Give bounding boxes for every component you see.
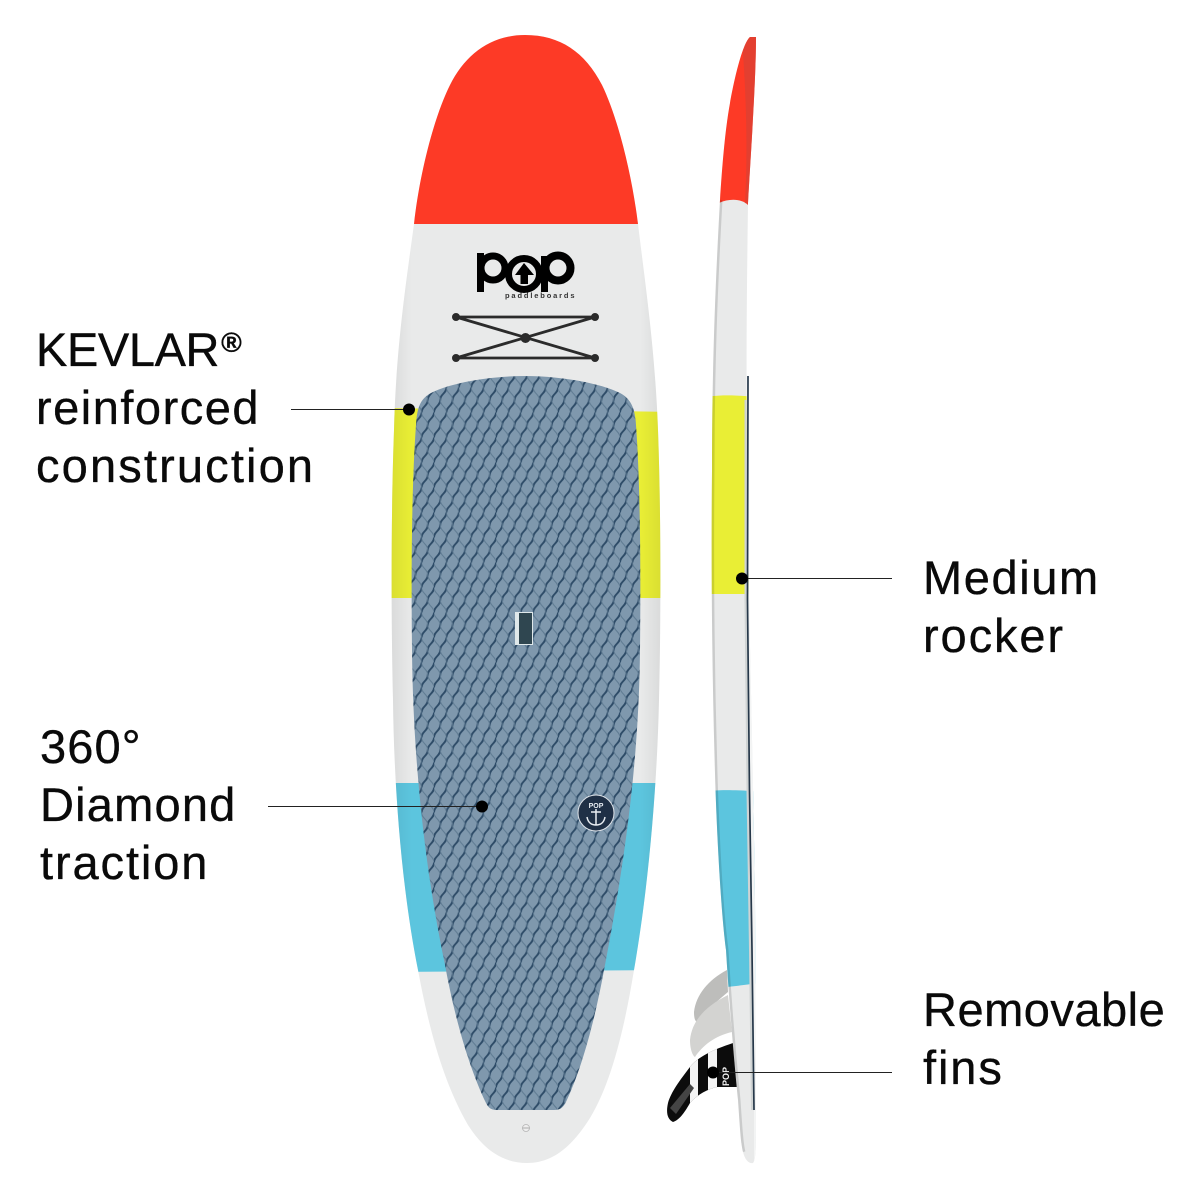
callout: Medium rocker: rocker — [923, 609, 1065, 662]
callout: Kevlar: ® — [221, 327, 242, 358]
callout: Diamond traction: traction — [40, 836, 209, 889]
carry handle — [515, 612, 533, 645]
callout: Diamond traction: 360° — [40, 720, 142, 773]
black striped fin: POP — [721, 1067, 731, 1086]
right side of deck line — [748, 556, 756, 1160]
leash plug — [522, 1124, 530, 1132]
callout: Kevlar: construction — [36, 439, 315, 492]
callout: Diamond traction: Diamond — [40, 778, 236, 831]
callout: Kevlar — [36, 323, 415, 492]
black striped fin — [667, 1043, 737, 1122]
anchor badge — [578, 795, 614, 831]
traction deck pad — [400, 370, 650, 1115]
fins — [667, 970, 737, 1122]
middle grey fin — [690, 995, 732, 1057]
callout: Kevlar: reinforced — [36, 381, 260, 434]
board colour bands — [392, 35, 660, 1163]
callout: Diamond traction — [40, 720, 488, 889]
callout: Kevlar: KEVLAR — [36, 323, 219, 376]
callout: Removable fins: fins — [923, 1041, 1004, 1094]
callout: Medium rocker — [736, 551, 1100, 662]
callout: Removable fins — [707, 983, 1165, 1094]
POP logo: paddleboards — [505, 291, 576, 300]
paddleboard top view — [392, 35, 660, 1163]
rear grey fin — [694, 970, 728, 1022]
anchor badge: POP — [589, 803, 604, 810]
callout: Medium rocker: Medium — [923, 551, 1100, 604]
callout: Removable fins: Removable — [923, 983, 1165, 1036]
deck pad edge — [748, 376, 754, 1110]
POP logo — [477, 253, 576, 300]
bungee deck straps — [452, 314, 598, 362]
left rail shading — [712, 200, 743, 1152]
paddleboard side view — [712, 37, 756, 1163]
